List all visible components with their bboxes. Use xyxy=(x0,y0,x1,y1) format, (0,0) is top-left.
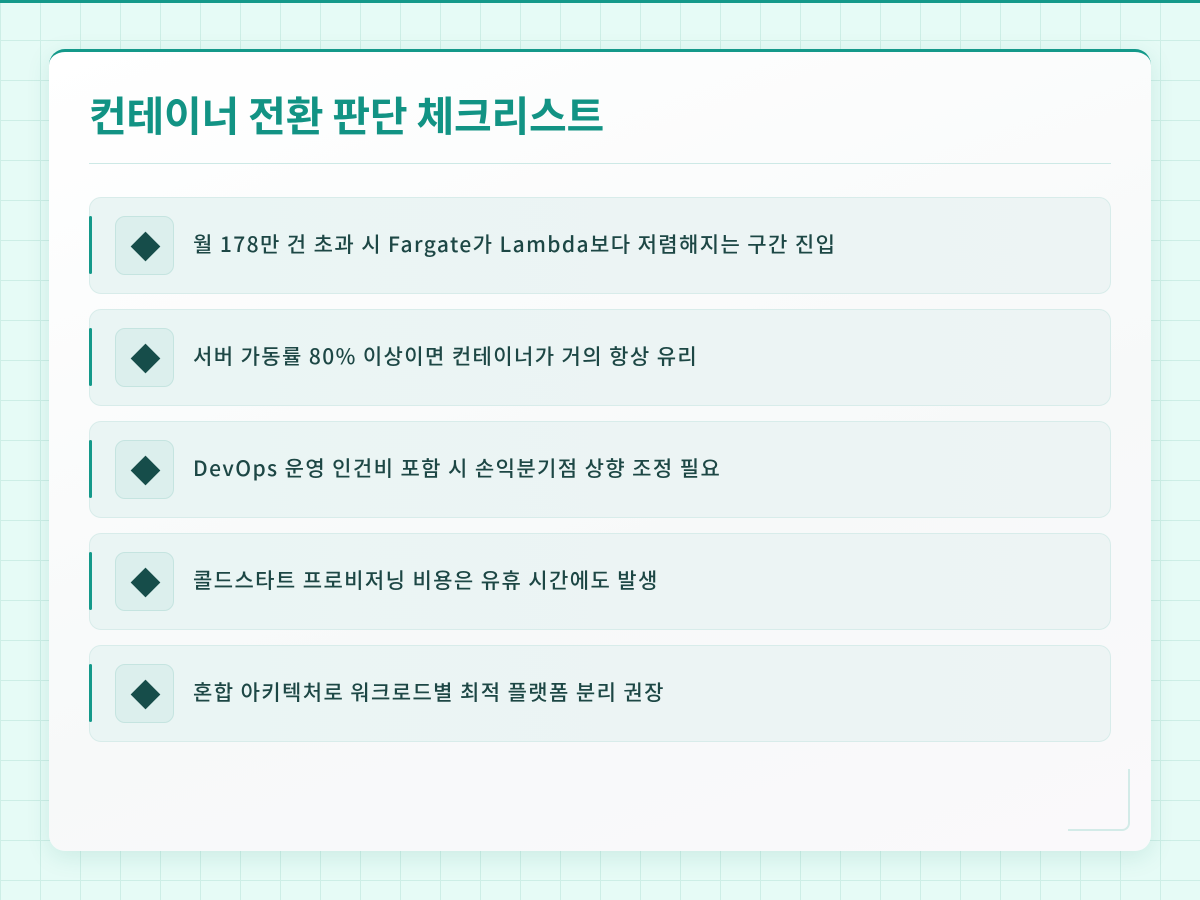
item 3 xyxy=(89,421,1111,518)
text 2: 서버 가동률 80% 이상이면 컨테이너가 거의 항상 유리 xyxy=(193,341,698,371)
icon: diamond xyxy=(115,328,174,387)
icon: diamond xyxy=(115,440,174,499)
title: 컨테이너 전환 판단 체크리스트 xyxy=(89,83,604,143)
text 5: 혼합 아키텍처로 워크로드별 최적 플랫폼 분리 권장 xyxy=(193,677,665,707)
icon: diamond xyxy=(115,664,174,723)
icon: diamond xyxy=(115,552,174,611)
item 1 xyxy=(89,197,1111,294)
item 4 xyxy=(89,533,1111,630)
text 1: 월 178만 건 초과 시 Fargate가 Lambda보다 저렴해지는 구간 진입 xyxy=(193,229,836,259)
item 2 xyxy=(89,309,1111,406)
text 3: DevOps 운영 인건비 포함 시 손익분기점 상향 조정 필요 xyxy=(193,453,721,483)
item 5 xyxy=(89,645,1111,742)
icon: diamond xyxy=(115,216,174,275)
text 4: 콜드스타트 프로비저닝 비용은 유휴 시간에도 발생 xyxy=(193,565,659,595)
